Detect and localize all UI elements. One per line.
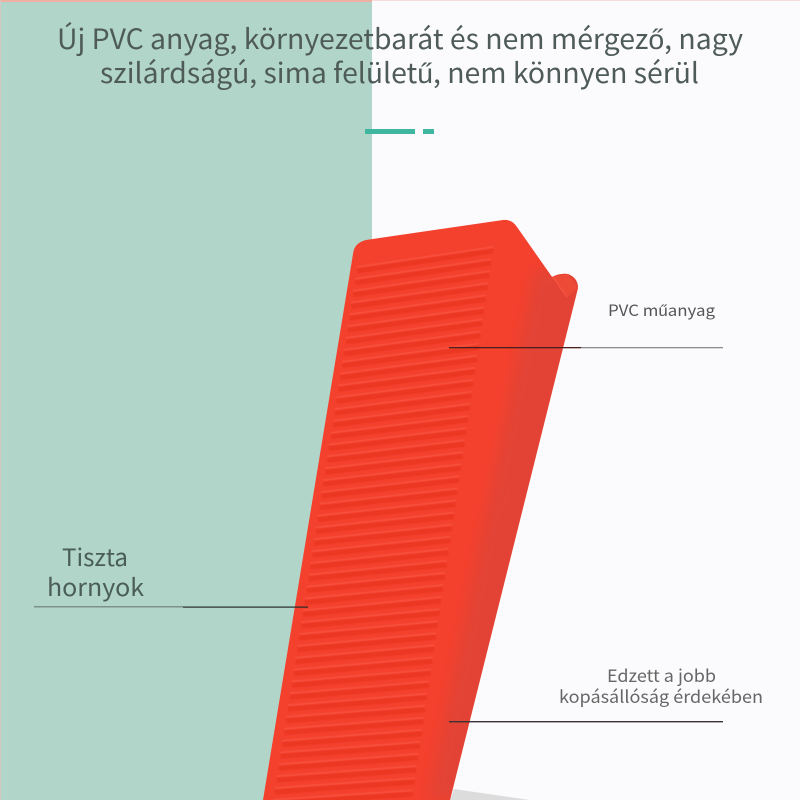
title accent dashes <box>365 129 434 134</box>
wedge grooves <box>273 247 493 800</box>
title: szilárdságú, sima felületű, nem könnyen sérül <box>100 52 699 92</box>
callout: Tiszta hornyok <box>34 538 308 608</box>
title <box>57 18 743 92</box>
callout: Edzett a jobb kopásállóság érdekében <box>449 662 763 722</box>
callout: Edzett a jobb kopásállóság érdekében: kopásállóság érdekében <box>559 683 763 708</box>
red PVC wedge <box>263 220 600 800</box>
callout: Edzett a jobb kopásállóság érdekében: Edzett a jobb <box>607 662 716 687</box>
callout: Tiszta hornyok: Tiszta <box>62 538 128 573</box>
wedge body <box>263 220 578 800</box>
title: Új PVC anyag, környezetbarát és nem mérgező, nagy <box>57 18 743 58</box>
callout: Tiszta hornyok: hornyok <box>47 568 144 603</box>
wedge side shading <box>430 227 578 800</box>
callout: PVC műanyag: PVC műanyag <box>608 299 715 321</box>
